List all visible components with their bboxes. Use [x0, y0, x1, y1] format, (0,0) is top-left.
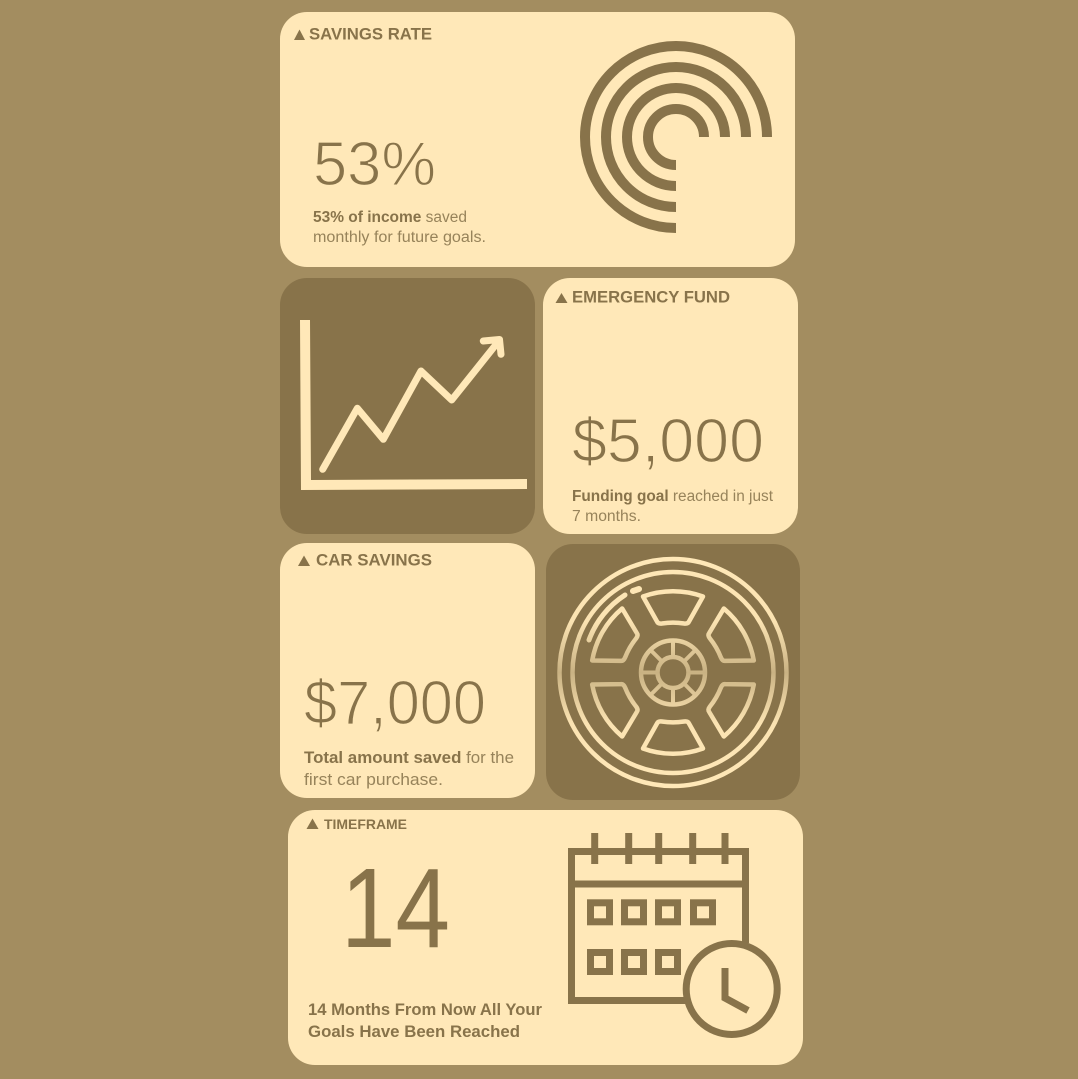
icon: triangle marker — [556, 293, 568, 303]
heading: car savings: CAR SAVINGS — [316, 552, 432, 570]
icon: rising trend arrow — [323, 340, 501, 469]
value: $5,000: $5,000 — [572, 407, 764, 476]
icon: triangle marker — [294, 30, 305, 40]
description: emergency fund: 7 months. — [572, 508, 641, 525]
icon: concentric arcs — [585, 46, 767, 228]
description: savings rate: monthly for future goals. — [313, 229, 486, 246]
panel: car savings — [280, 543, 535, 798]
heading: savings rate: SAVINGS RATE — [309, 26, 432, 44]
icon: chart axes — [300, 320, 527, 490]
panel: timeframe — [288, 810, 803, 1065]
description: emergency fund — [572, 488, 774, 525]
description: emergency fund: Funding goal reached in just — [572, 488, 774, 505]
icon: triangle marker — [306, 818, 318, 829]
description: savings rate: 53% of income saved — [313, 209, 467, 226]
value: 14: 14 — [341, 845, 450, 971]
description: timeframe — [308, 1000, 542, 1041]
panel: emergency fund — [543, 278, 798, 534]
heading: timeframe: TIMEFRAME — [324, 816, 407, 832]
icon: calendar with clock — [572, 833, 777, 1034]
panel: savings rate — [280, 12, 795, 267]
description: savings rate — [313, 209, 486, 246]
description: timeframe: Goals Have Been Reached — [308, 1022, 520, 1041]
panel: growth chart — [280, 278, 535, 534]
value: $7,000: $7,000 — [304, 669, 486, 738]
heading: emergency fund: EMERGENCY FUND — [572, 288, 730, 306]
description: timeframe: 14 Months From Now All Your — [308, 1000, 542, 1019]
icon: car wheel — [557, 556, 789, 788]
description: car savings: first car purchase. — [304, 771, 443, 789]
value: 53%: 53% — [313, 130, 436, 199]
description: car savings — [304, 749, 514, 789]
icon: triangle marker — [298, 556, 310, 566]
panel: wheel — [546, 544, 800, 800]
description: car savings: Total amount saved for the — [304, 749, 514, 767]
